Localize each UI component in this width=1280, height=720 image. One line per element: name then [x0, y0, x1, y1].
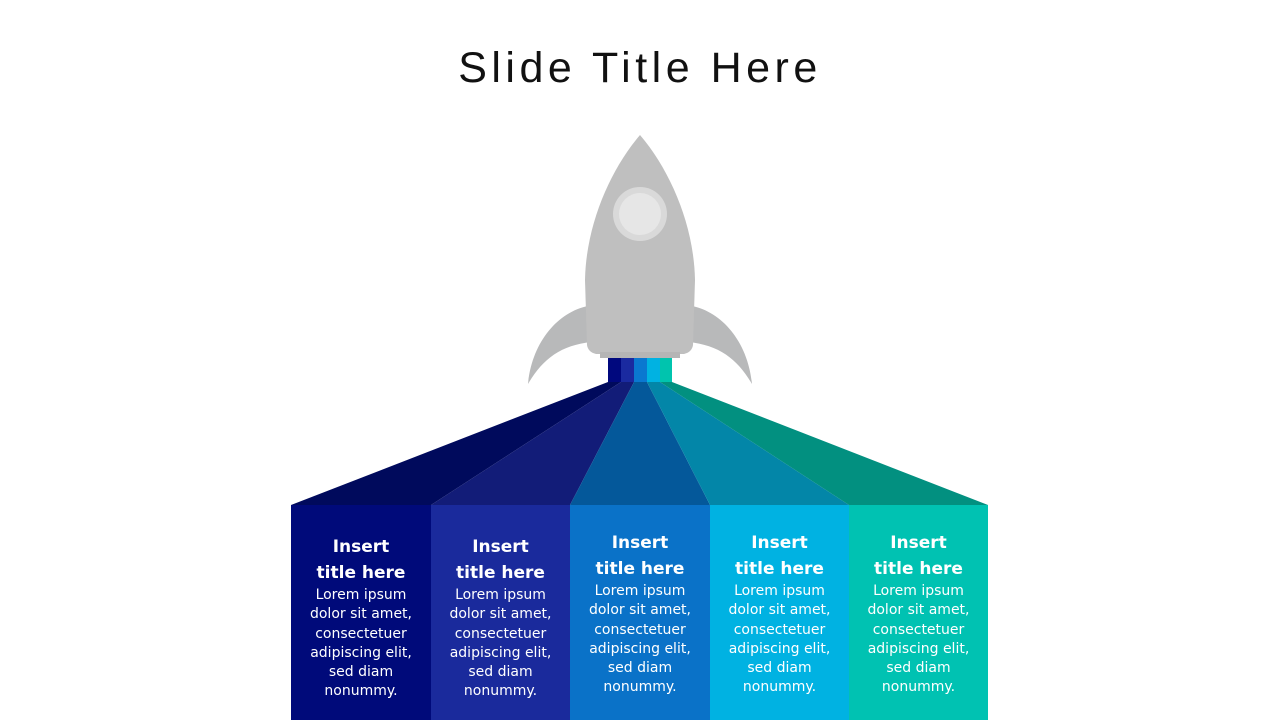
- panel 4: consectetuer: [734, 622, 825, 638]
- panel 3: Lorem ipsum: [595, 583, 685, 599]
- panel 4: sed diam: [747, 660, 812, 676]
- panel 1: nonummy.: [324, 683, 398, 699]
- panel 5: dolor sit amet,: [867, 602, 970, 618]
- panel 5: Lorem ipsum: [873, 583, 964, 599]
- rocket: [528, 135, 752, 384]
- beams: [291, 382, 988, 505]
- panel 5: sed diam: [886, 660, 951, 676]
- panel 3: sed diam: [608, 660, 672, 676]
- panel 3: nonummy.: [603, 679, 677, 695]
- exhaust strips: [608, 355, 672, 382]
- panel 3: dolor sit amet,: [589, 602, 691, 618]
- panel 1: title here: [317, 563, 405, 583]
- panel 4: Insert: [751, 533, 808, 553]
- panel 5: [849, 505, 988, 720]
- panel 4: title here: [735, 559, 824, 579]
- panel 3: [570, 505, 710, 720]
- panel 5: adipiscing elit,: [868, 641, 969, 657]
- panel 2: sed diam: [468, 664, 533, 680]
- panel 3: consectetuer: [594, 622, 686, 638]
- panel 3: title here: [596, 559, 684, 579]
- panel 5: Insert: [890, 533, 947, 553]
- panel 4: [710, 505, 849, 720]
- panel 5: title here: [874, 559, 963, 579]
- panel 4: Lorem ipsum: [734, 583, 825, 599]
- panel 1: [291, 505, 431, 720]
- title: Slide Title Here: [458, 44, 822, 92]
- panel 5: consectetuer: [873, 622, 964, 638]
- panel 2: adipiscing elit,: [450, 645, 551, 661]
- panel 2: Lorem ipsum: [455, 587, 546, 603]
- panel 2: title here: [456, 563, 545, 583]
- panel 5: nonummy.: [882, 679, 955, 695]
- panel 3: Insert: [612, 533, 668, 553]
- panel 2: nonummy.: [464, 683, 537, 699]
- panel 1: dolor sit amet,: [310, 606, 412, 622]
- panel 2: Insert: [472, 537, 529, 557]
- panel 2: consectetuer: [455, 626, 546, 642]
- panel 4: adipiscing elit,: [729, 641, 830, 657]
- panel 2: dolor sit amet,: [449, 606, 552, 622]
- panel 4: dolor sit amet,: [728, 602, 830, 618]
- panel 1: sed diam: [329, 664, 393, 680]
- panel 2: [431, 505, 570, 720]
- panel 1: consectetuer: [315, 626, 407, 642]
- panel 4: nonummy.: [743, 679, 816, 695]
- panel 1: Insert: [333, 537, 389, 557]
- panel 3: adipiscing elit,: [589, 641, 691, 657]
- panel 1: adipiscing elit,: [310, 645, 412, 661]
- panel 1: Lorem ipsum: [316, 587, 406, 603]
